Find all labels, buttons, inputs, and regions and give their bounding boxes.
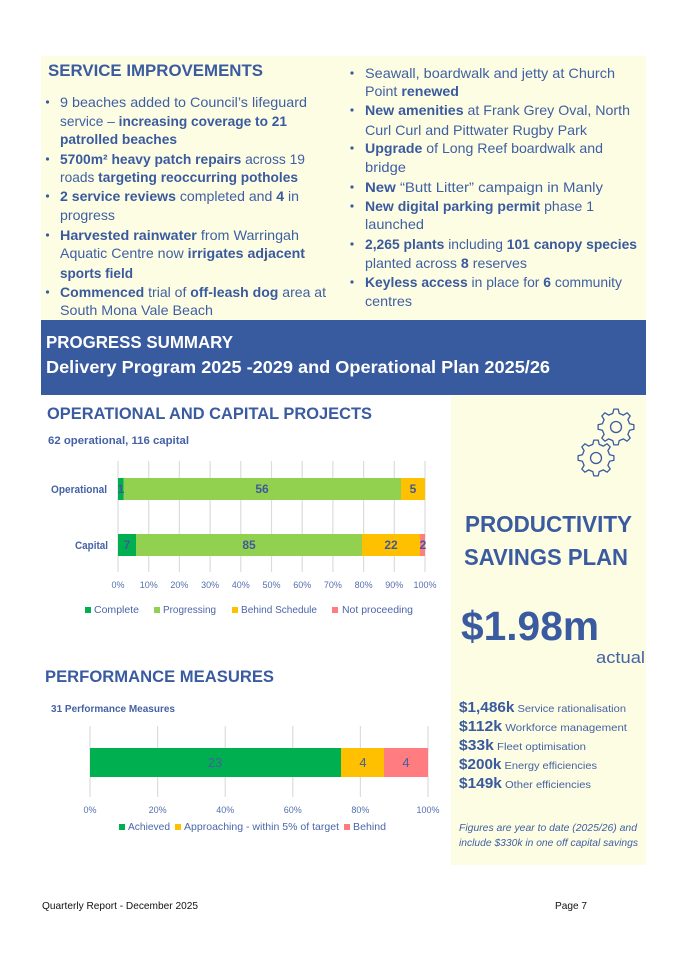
text block: left bullet list: 9 beaches added to Council’s lifeguard xyxy=(60,94,307,110)
text block: right bullet list: New amenities at Frank Grey Oval, North xyxy=(365,102,630,118)
text block: right bullet list: Curl Curl and Pittwater Rugby Park xyxy=(365,122,588,138)
bar: capital: 85 xyxy=(242,538,256,552)
axis labels: 40% xyxy=(232,580,250,590)
bar: operational: 56 xyxy=(255,482,269,496)
panel: service improvements xyxy=(41,56,646,321)
legend: Behind xyxy=(353,821,386,833)
legend: Complete xyxy=(94,604,139,616)
legend: Approaching - within 5% of target xyxy=(184,821,339,833)
text block: savings breakdown: $33k Fleet optimisation xyxy=(459,738,586,754)
label: actual: actual xyxy=(596,649,645,667)
text block: right bullet list: planted across 8 reserves xyxy=(365,255,527,271)
bar: measures xyxy=(90,748,428,777)
subheading: measure count: 31 Performance Measures xyxy=(51,703,175,715)
note: year to date figures xyxy=(459,822,639,849)
note: year to date figures: include $330k in one off capital savings xyxy=(459,837,639,849)
heading: performance measures: PERFORMANCE MEASURES xyxy=(45,667,274,686)
text block: left bullet list xyxy=(46,94,326,318)
text block: savings breakdown xyxy=(459,700,627,792)
heading: service improvements: SERVICE IMPROVEMENTS xyxy=(48,61,263,80)
heading: productivity savings plan: PRODUCTIVITY xyxy=(465,511,632,537)
text block: savings breakdown: $1,486k Service rationalisation xyxy=(459,700,626,716)
legend: Not proceeding xyxy=(342,604,413,616)
bar: operational: 1 xyxy=(118,482,125,496)
text block: left bullet list: patrolled beaches xyxy=(60,131,177,147)
text block: right bullet list: New digital parking permit phase 1 xyxy=(365,198,594,214)
text block: left bullet list: progress xyxy=(60,207,115,223)
text block: right bullet list: Upgrade of Long Reef boardwalk and xyxy=(365,140,603,156)
text block: right bullet list: Point renewed xyxy=(365,83,459,99)
legend: Achieved xyxy=(128,821,170,833)
axis labels: 100% xyxy=(413,580,437,590)
axis labels xyxy=(83,805,440,815)
text block: right bullet list xyxy=(350,65,637,309)
text block: left bullet list: Aquatic Centre now irrigates adjacent xyxy=(60,245,305,261)
bar: capital: Capital xyxy=(75,540,108,552)
axis labels: 60% xyxy=(293,580,311,590)
axis labels: 20% xyxy=(170,580,188,590)
bar: capital: 2 xyxy=(420,538,427,552)
legend: Progressing xyxy=(163,604,216,616)
axis labels: 80% xyxy=(355,580,373,590)
text block: right bullet list: New “Butt Litter” campaign in Manly xyxy=(365,179,603,195)
text block: savings breakdown: $112k Workforce management xyxy=(459,719,627,735)
axis labels: 80% xyxy=(351,805,369,815)
axis labels xyxy=(111,580,437,590)
bar: measures: 23 xyxy=(208,755,222,770)
axis labels: 20% xyxy=(149,805,167,815)
bar: operational: 5 xyxy=(410,482,417,496)
heading: productivity savings plan: SAVINGS PLAN xyxy=(464,544,628,570)
heading: productivity savings plan xyxy=(464,511,632,570)
axis labels: 100% xyxy=(416,805,440,815)
text block: right bullet list: centres xyxy=(365,293,412,309)
text block: savings breakdown: $149k Other efficiencies xyxy=(459,776,591,792)
text block: savings breakdown: $200k Energy efficiencies xyxy=(459,757,597,773)
axis labels: 0% xyxy=(111,580,125,590)
text block: left bullet list: sports field xyxy=(60,265,133,281)
icon: gears xyxy=(578,409,634,476)
text block: right bullet list: Seawall, boardwalk and jetty at Church xyxy=(365,65,615,81)
bar: operational xyxy=(51,478,425,500)
axis labels: 10% xyxy=(140,580,158,590)
footer xyxy=(42,900,587,912)
text block: left bullet list: Harvested rainwater from Warringah xyxy=(60,227,299,243)
bar: capital: 7 xyxy=(124,538,131,552)
axis labels: 70% xyxy=(324,580,342,590)
text block: right bullet list: Keyless access in place for 6 community xyxy=(365,274,622,290)
subheading: delivery program: Delivery Program 2025 -2029 and Operational Plan 2025/26 xyxy=(46,357,550,377)
axis labels: 30% xyxy=(201,580,219,590)
big number: savings total: $1.98m xyxy=(461,603,599,649)
text block: left bullet list: service – increasing coverage to 21 xyxy=(60,113,287,129)
bar chart: performance measures xyxy=(83,726,440,833)
text block: left bullet list: roads targeting reoccurring potholes xyxy=(60,169,298,185)
bar: operational: Operational xyxy=(51,484,107,496)
heading: operational and capital projects: OPERATIONAL AND CAPITAL PROJECTS xyxy=(47,404,372,423)
legend xyxy=(85,604,413,616)
text block: right bullet list: bridge xyxy=(365,159,406,175)
bar: capital xyxy=(75,534,427,556)
panel: progress summary banner xyxy=(41,320,646,395)
bar chart: operational and capital projects xyxy=(51,461,437,616)
text block: left bullet list: South Mona Vale Beach xyxy=(60,302,213,318)
footer: Page 7 xyxy=(555,900,587,912)
bar: measures: 4 xyxy=(359,755,367,770)
text block: right bullet list: 2,265 plants including 101 canopy species xyxy=(365,236,637,252)
legend: Behind Schedule xyxy=(241,604,317,616)
legend xyxy=(119,821,386,833)
note: year to date figures: Figures are year to date (2025/26) and xyxy=(459,822,638,834)
axis labels: 40% xyxy=(216,805,234,815)
text block: right bullet list: launched xyxy=(365,216,424,232)
axis labels: 0% xyxy=(83,805,97,815)
text block: left bullet list: Commenced trial of off-leash dog area at xyxy=(60,284,326,300)
panel: productivity savings plan xyxy=(451,396,646,865)
heading: progress summary: PROGRESS SUMMARY xyxy=(46,332,233,352)
axis labels: 60% xyxy=(284,805,302,815)
axis labels: 50% xyxy=(262,580,281,590)
bar: measures: 4 xyxy=(402,755,410,770)
text block: left bullet list: 5700m² heavy patch repairs across 19 xyxy=(60,151,305,167)
text block: left bullet list: 2 service reviews completed and 4 in xyxy=(60,188,299,204)
subheading: project counts: 62 operational, 116 capital xyxy=(48,435,189,447)
axis labels: 90% xyxy=(385,580,403,590)
footer: Quarterly Report - December 2025 xyxy=(42,900,198,912)
bar: capital: 22 xyxy=(384,538,398,552)
